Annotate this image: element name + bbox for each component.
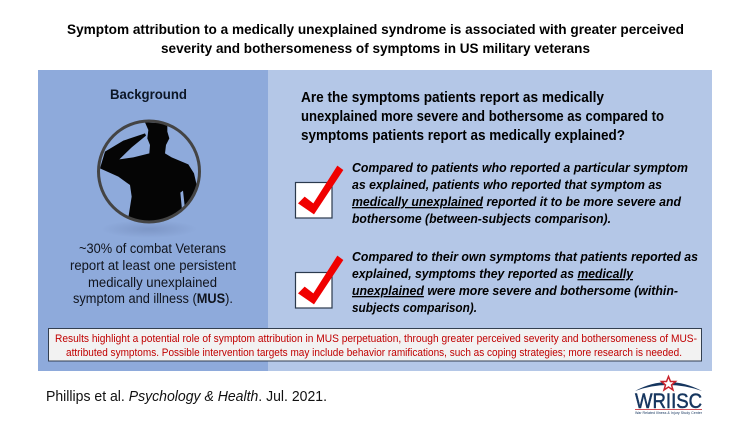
icon: saluting soldier — [98, 121, 200, 227]
heading: research question: symptoms patients report as medically explained? — [301, 127, 625, 144]
logo: WRIISC — [635, 376, 703, 415]
text: within-subjects finding: unexplained were more severe and bothersome (within- — [352, 283, 678, 298]
callout: results — [48, 328, 702, 361]
panel: findings — [268, 70, 712, 371]
text: between-subjects finding: medically unexplained reported it to be more severe and — [352, 194, 682, 209]
title: severity and bothersomeness of symptoms in US military veterans — [161, 40, 590, 56]
text: veterans statistic — [70, 241, 236, 306]
logo: WRIISC: War Related Illness & Injury Study Center — [635, 411, 703, 415]
heading: background: Background — [110, 86, 187, 102]
callout: results: attributed symptoms. Possible intervention targets may include behavior ramifications, such as coping strategies; more research is needed. — [66, 347, 682, 359]
text: between-subjects finding: Compared to patients who reported a particular symptom — [352, 160, 688, 175]
text: between-subjects finding: bothersome (between-subjects comparison). — [352, 211, 611, 226]
text: veterans statistic: symptom and illness (MUS). — [73, 291, 233, 306]
title: Symptom attribution to a medically unexplained syndrome is associated with greater perceived — [67, 21, 684, 37]
text: between-subjects finding — [352, 160, 688, 226]
icon: checkbox one — [296, 166, 343, 218]
text: within-subjects finding: subjects comparison). — [352, 300, 477, 315]
text: veterans statistic: medically unexplained — [88, 275, 217, 290]
main panel — [38, 70, 712, 371]
heading: research question: Are the symptoms patients report as medically — [301, 89, 605, 106]
title — [67, 21, 684, 56]
text: veterans statistic: report at least one persistent — [70, 258, 236, 273]
logo: WRIISC: WRIISC — [635, 390, 702, 413]
callout: results: Results highlight a potential role of symptom attribution in MUS perpetuation, through greater perceived severity and bothersomeness of MUS- — [55, 333, 697, 345]
text: within-subjects finding — [352, 249, 698, 315]
text: within-subjects finding: Compared to their own symptoms that patients reported as — [352, 249, 698, 264]
panel: background — [38, 70, 268, 371]
text: between-subjects finding: as explained, patients who reported that symptom as — [352, 177, 662, 192]
text: veterans statistic: ~30% of combat Veterans — [79, 241, 226, 256]
text: within-subjects finding: explained, symptoms they reported as medically — [352, 266, 634, 281]
icon: checkbox two — [296, 256, 343, 308]
heading: research question: unexplained more severe and bothersome as compared to — [301, 108, 664, 125]
citation: Phillips et al. Psychology & Health. Jul. 2021. — [46, 389, 327, 405]
heading: research question — [301, 89, 664, 144]
